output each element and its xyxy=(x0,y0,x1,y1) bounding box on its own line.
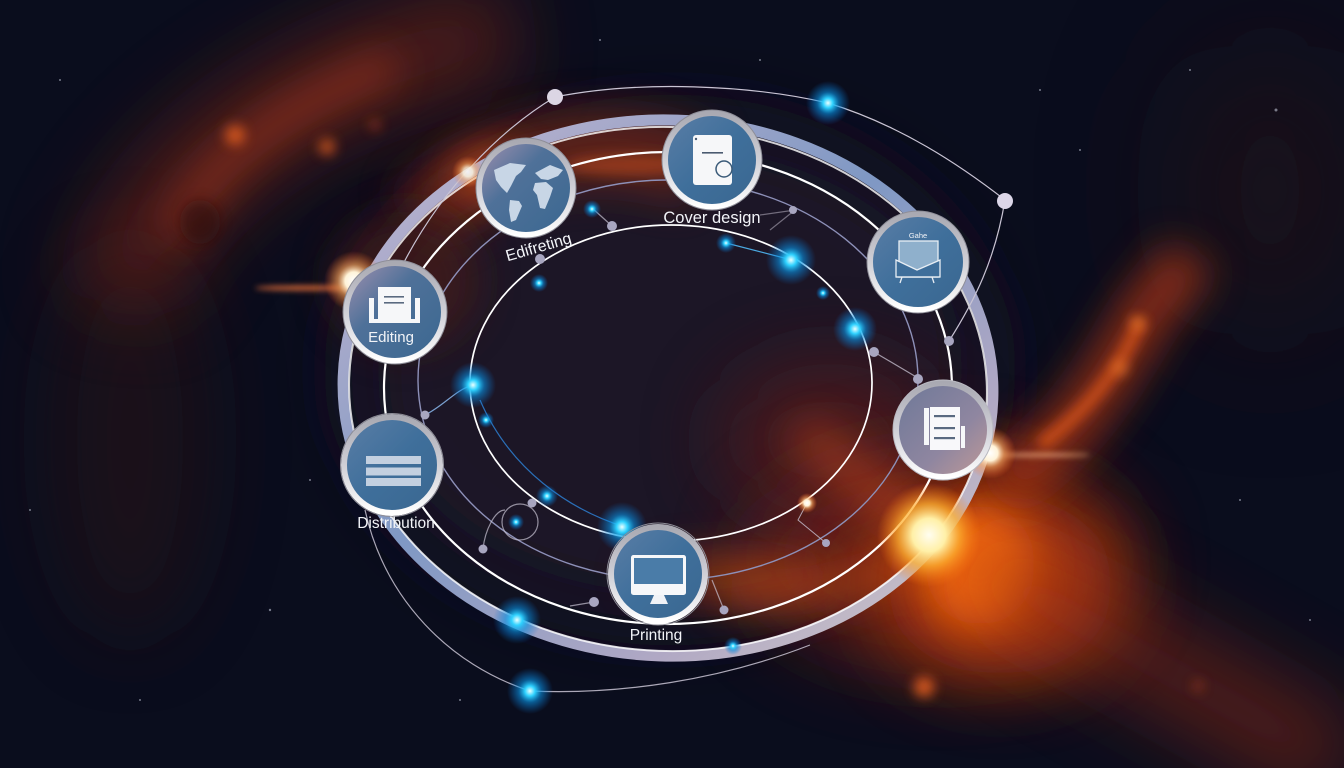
label: distribution: Distribution xyxy=(357,515,435,532)
outer thin orbit and connector lines xyxy=(365,87,1005,692)
blue glowing nodes xyxy=(450,81,877,714)
label: gahe: Gahe xyxy=(909,231,927,240)
lens flares xyxy=(255,156,1090,587)
connector dots xyxy=(420,89,1013,614)
label: edifreting: Edifreting xyxy=(504,230,574,265)
third faint ring xyxy=(418,180,918,580)
icon: envelope monitor xyxy=(896,241,940,283)
node: document xyxy=(893,380,993,480)
label: cover design: Cover design xyxy=(663,209,761,227)
icon: stacked bars xyxy=(366,456,421,486)
node: cover design xyxy=(662,110,762,210)
inner white ring xyxy=(470,225,872,541)
second white ring xyxy=(384,152,952,624)
node: printing xyxy=(607,523,709,625)
icon: pages xyxy=(924,407,965,450)
node: screen envelope xyxy=(867,211,969,313)
orbit rings xyxy=(334,109,1002,667)
node: editing xyxy=(343,260,447,364)
icon: world map xyxy=(494,163,563,222)
icon: monitor xyxy=(631,555,686,604)
label: printing: Printing xyxy=(630,627,682,644)
node: globe xyxy=(476,138,576,238)
label: editing: Editing xyxy=(368,329,414,346)
icon: document with badge xyxy=(693,135,732,185)
faint inner blue arc xyxy=(480,400,625,527)
node: distribution xyxy=(340,414,444,516)
icon: open book xyxy=(369,287,420,323)
thick outer ring xyxy=(334,109,1002,667)
